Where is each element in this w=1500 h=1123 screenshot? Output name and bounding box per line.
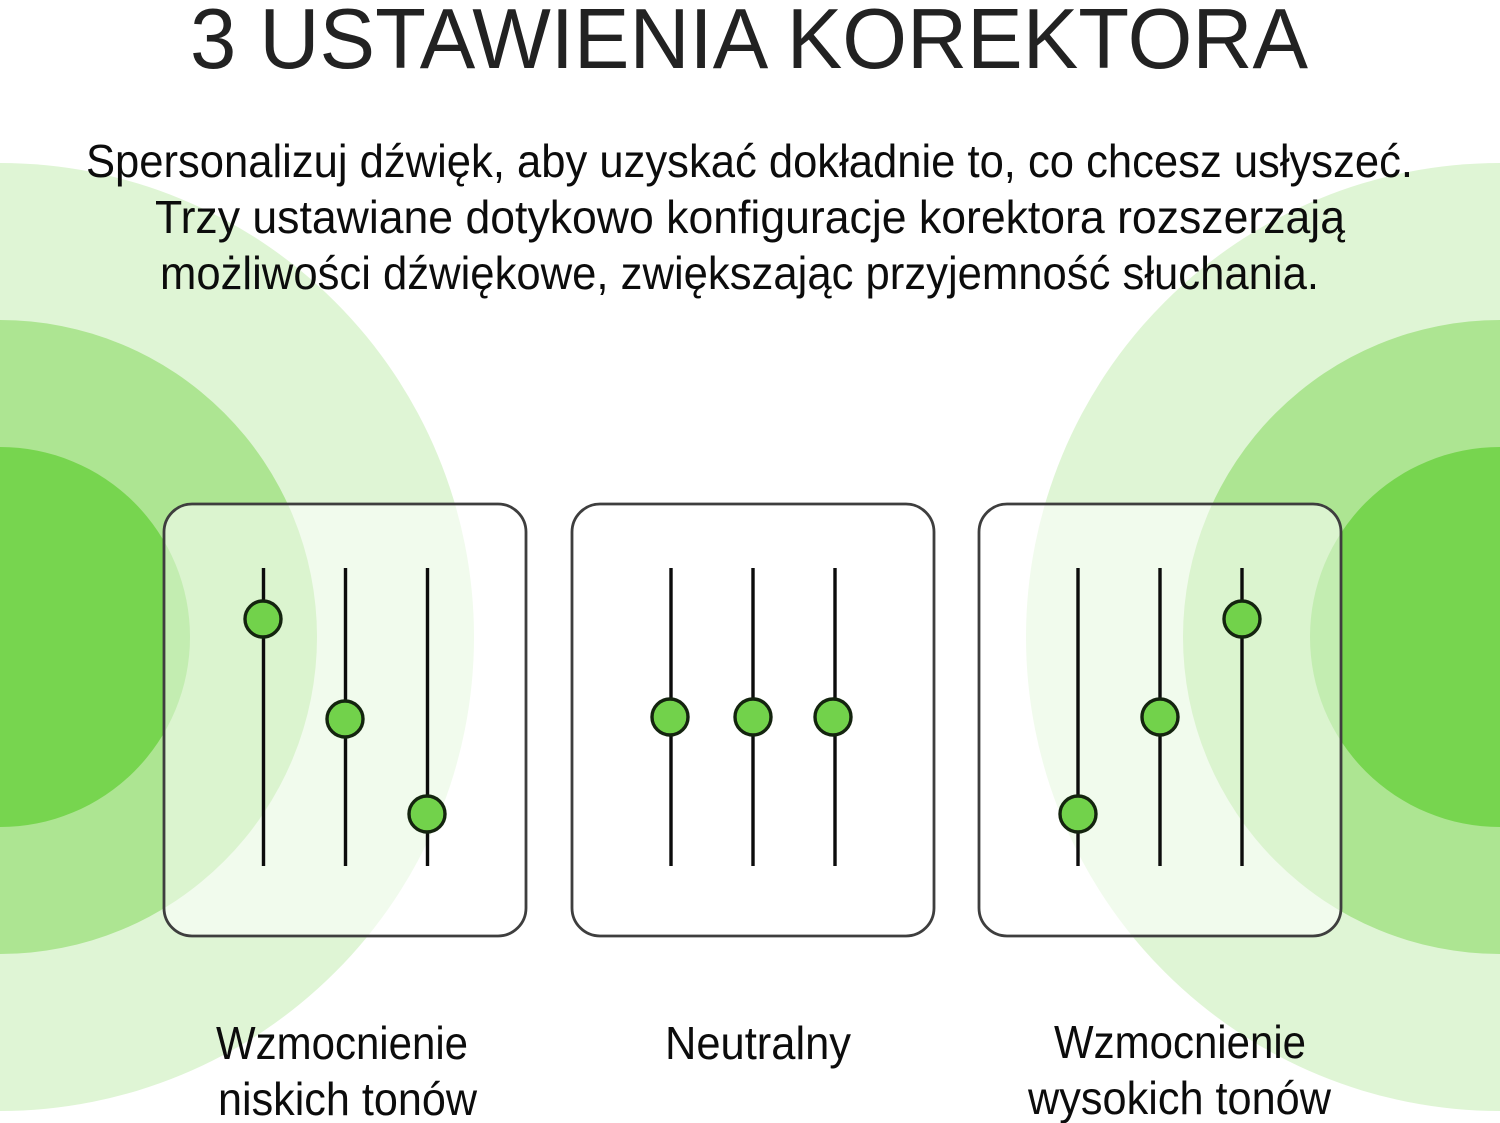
label: bass boost bbox=[216, 1017, 478, 1123]
slider: low band bbox=[1060, 568, 1096, 866]
intro paragraph: Trzy ustawiane dotykowo konfiguracje korektora rozszerzają bbox=[155, 191, 1345, 243]
slider: mid band bbox=[327, 568, 363, 866]
panel: neutral equalizer bbox=[572, 504, 934, 936]
intro paragraph bbox=[86, 135, 1413, 299]
label: neutral: Neutralny bbox=[665, 1017, 851, 1069]
label: treble boost bbox=[1027, 1016, 1332, 1123]
slider: mid band bbox=[735, 568, 771, 866]
panel: treble boost equalizer bbox=[979, 504, 1341, 936]
left concentric green sound circles bbox=[0, 163, 474, 1111]
label: bass boost: Wzmocnienie bbox=[216, 1017, 468, 1069]
slider: low band bbox=[652, 568, 688, 866]
slider: low band bbox=[245, 568, 281, 866]
intro paragraph: Spersonalizuj dźwięk, aby uzyskać dokładnie to, co chcesz usłyszeć. bbox=[86, 135, 1413, 187]
slider: high band bbox=[1224, 568, 1260, 866]
right concentric green sound circles bbox=[1026, 163, 1500, 1111]
slider: high band bbox=[815, 568, 851, 866]
label: treble boost: wysokich tonów bbox=[1027, 1072, 1332, 1123]
intro paragraph: możliwości dźwiękowe, zwiększając przyjemność słuchania. bbox=[160, 247, 1319, 299]
panel: bass boost equalizer bbox=[164, 504, 526, 936]
slider: high band bbox=[409, 568, 445, 866]
slider: mid band bbox=[1142, 568, 1178, 866]
label: treble boost: Wzmocnienie bbox=[1054, 1016, 1306, 1068]
